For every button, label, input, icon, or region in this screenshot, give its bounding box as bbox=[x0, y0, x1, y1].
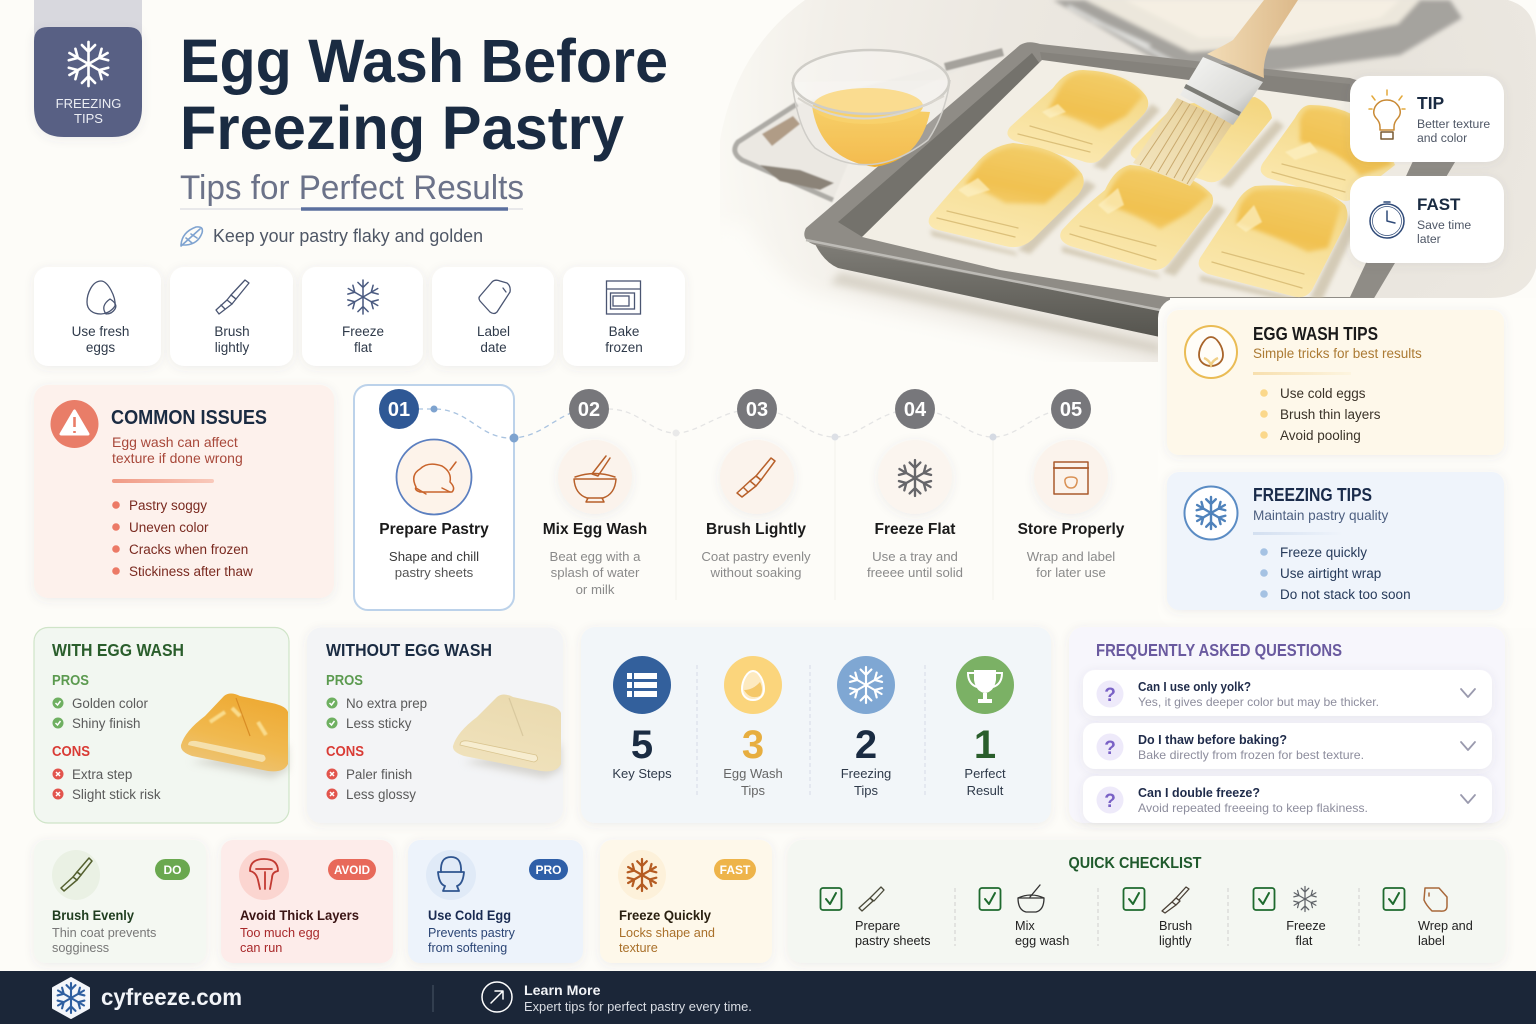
tip card: pro bbox=[408, 840, 583, 963]
subtitle: Tips for Perfect Results bbox=[180, 169, 524, 207]
panel: freezing tips: FREEZING TIPS bbox=[1253, 485, 1372, 505]
tip card: pro: from softening bbox=[428, 941, 507, 955]
badge: freezing tips: FREEZING bbox=[56, 96, 121, 111]
pastry 6 bbox=[1199, 185, 1348, 297]
tip card: avoid: can run bbox=[240, 941, 282, 955]
callout: tip bbox=[1350, 76, 1504, 162]
step 05 store properly bbox=[1018, 389, 1125, 580]
badge: fast: FAST bbox=[720, 863, 751, 877]
tip card: do: Brush Evenly bbox=[52, 907, 134, 923]
icon: arrow circle bbox=[482, 982, 512, 1012]
step 04 freeze flat: Freeze Flat bbox=[875, 521, 955, 538]
faq row 1: Can I use only yolk? bbox=[1138, 679, 1251, 694]
panel: brush lightly: lightly bbox=[215, 340, 250, 355]
panel: without egg wash: PROS bbox=[326, 673, 363, 689]
faq row 3 bbox=[1083, 776, 1492, 823]
step 02 mix egg wash: Mix Egg Wash bbox=[543, 521, 647, 538]
step 01 prepare pastry: pastry sheets bbox=[395, 565, 474, 580]
panel: common issues: Egg wash can affect bbox=[112, 434, 238, 450]
icon: egg in cup bbox=[438, 857, 464, 891]
badge: do bbox=[155, 859, 190, 880]
stat: egg wash tips: Tips bbox=[741, 783, 766, 798]
step 05 store properly: Store Properly bbox=[1018, 521, 1125, 538]
panel: use fresh eggs: Use fresh bbox=[72, 324, 129, 339]
row of six rolled pastries bbox=[929, 70, 1395, 297]
panel: without egg wash: No extra prep bbox=[346, 696, 427, 711]
footer bar: cyfreeze.com bbox=[101, 984, 242, 1010]
panel: freeze flat: flat bbox=[354, 340, 372, 355]
step 02 mix egg wash: or milk bbox=[576, 582, 615, 597]
panel: bake frozen: frozen bbox=[605, 340, 643, 355]
panel: freeze flat: Freeze bbox=[342, 324, 384, 339]
step 1 highlight card bbox=[354, 385, 514, 610]
panel: freezing tips: Do not stack too soon bbox=[1280, 587, 1411, 602]
process timeline bbox=[354, 385, 1125, 610]
panel: quick checklist: QUICK CHECKLIST bbox=[1068, 855, 1202, 872]
icon: snowflake ring bbox=[1184, 486, 1238, 540]
badge: fast bbox=[714, 859, 756, 880]
icon: stopwatch bbox=[1370, 202, 1404, 238]
tip card: pro: Use Cold Egg bbox=[428, 907, 511, 923]
stat: perfect result: 1 bbox=[974, 723, 996, 767]
panel: bake frozen: Bake bbox=[609, 324, 639, 339]
icon: light bulb bbox=[1369, 90, 1405, 139]
panel: without egg wash: Less sticky bbox=[346, 716, 412, 731]
stat: egg wash tips bbox=[723, 656, 783, 798]
faq row 3: Avoid repeated freeeing to keep flakiness. bbox=[1138, 801, 1368, 815]
check item: prepare: pastry sheets bbox=[855, 934, 930, 948]
callout: tip: and color bbox=[1417, 131, 1467, 145]
check item: mix bbox=[980, 885, 1069, 948]
panel: brush lightly: Brush bbox=[214, 324, 250, 339]
step 04 freeze flat bbox=[867, 389, 963, 580]
callout: fast bbox=[1350, 176, 1504, 263]
stat: key steps: 5 bbox=[631, 723, 653, 767]
pastry 1 bbox=[1007, 70, 1148, 163]
panel: brush lightly bbox=[170, 267, 293, 366]
check item: brush: lightly bbox=[1159, 934, 1192, 948]
tip card: do: Thin coat prevents bbox=[52, 926, 156, 940]
dashed connector bbox=[418, 409, 589, 438]
step 03 brush lightly bbox=[701, 389, 811, 580]
step 03 brush lightly: Brush Lightly bbox=[706, 521, 806, 538]
panel: with egg wash: Extra step bbox=[72, 767, 132, 782]
stat: perfect result: Result bbox=[967, 783, 1004, 798]
faq row 1: ? bbox=[1104, 685, 1116, 706]
callout: fast: later bbox=[1417, 232, 1441, 246]
step 01 prepare pastry: Shape and chill bbox=[389, 549, 479, 564]
tip card: fast: texture bbox=[619, 941, 658, 955]
stat: egg wash tips: Egg Wash bbox=[723, 766, 783, 781]
hero photo: egg-washed pastry on tray with brush bbox=[731, 0, 1536, 362]
step 05 store properly: for later use bbox=[1036, 565, 1106, 580]
check item: freeze: Freeze bbox=[1286, 919, 1326, 933]
tip card: fast bbox=[600, 840, 772, 963]
step 01 prepare pastry: Prepare Pastry bbox=[379, 521, 489, 538]
check item: wrap: Wrep and bbox=[1418, 919, 1473, 933]
panel: with egg wash bbox=[34, 628, 289, 823]
faq row 2: Bake directly from frozen for best texture. bbox=[1138, 748, 1364, 762]
callout: tip: Better texture bbox=[1417, 117, 1490, 131]
icon: oven bbox=[606, 281, 640, 314]
badge: freezing tips: TIPS bbox=[74, 111, 103, 126]
panel: freezing tips: Use airtight wrap bbox=[1280, 566, 1381, 581]
panel: key numbers bbox=[581, 627, 1051, 823]
icon: dripping egg bbox=[250, 859, 278, 889]
pastry shadows bbox=[930, 104, 1360, 305]
step 03 brush lightly: Coat pastry evenly bbox=[701, 549, 811, 564]
check item: wrap bbox=[1384, 888, 1473, 948]
badge: do: DO bbox=[164, 863, 182, 877]
stat: freezing tips: Freezing bbox=[841, 766, 891, 781]
icon: brush bbox=[216, 280, 249, 314]
tip card: avoid: Too much egg bbox=[240, 926, 320, 940]
panel: faq bbox=[1069, 627, 1505, 823]
check item: prepare: Prepare bbox=[855, 919, 900, 933]
check item: freeze bbox=[1254, 886, 1326, 948]
faq row 3: ? bbox=[1104, 791, 1116, 812]
panel: with egg wash: Shiny finish bbox=[72, 716, 140, 731]
icon: snowflake bbox=[626, 859, 658, 891]
panel: use fresh eggs: eggs bbox=[86, 340, 115, 355]
panel: with egg wash: WITH EGG WASH bbox=[52, 640, 184, 660]
footer bar bbox=[0, 971, 1536, 1024]
panel: common issues bbox=[34, 385, 334, 598]
tagline: Keep your pastry flaky and golden bbox=[213, 226, 483, 246]
step 02 mix egg wash bbox=[543, 389, 647, 597]
panel: with egg wash: PROS bbox=[52, 673, 89, 689]
panel: faq: FREQUENTLY ASKED QUESTIONS bbox=[1096, 640, 1342, 660]
check item: freeze: flat bbox=[1296, 934, 1313, 948]
check item: prepare bbox=[820, 887, 930, 948]
faq row 1 bbox=[1083, 670, 1492, 716]
panel: common issues: Uneven color bbox=[129, 520, 209, 535]
stat: freezing tips: Tips bbox=[854, 783, 879, 798]
faq row 2: Do I thaw before baking? bbox=[1138, 732, 1287, 747]
tip card: avoid: Avoid Thick Layers bbox=[240, 907, 359, 923]
panel: with egg wash: CONS bbox=[52, 744, 90, 760]
icon: tag bbox=[479, 280, 510, 314]
stat: egg wash tips: 3 bbox=[742, 723, 764, 767]
pastry 5 bbox=[1261, 105, 1395, 201]
badge: avoid bbox=[328, 859, 376, 880]
stat: freezing tips: 2 bbox=[855, 723, 877, 767]
icon: snowflake bbox=[66, 42, 111, 86]
panel: freezing tips bbox=[1167, 472, 1504, 610]
panel: common issues: texture if done wrong bbox=[112, 450, 243, 466]
check item: brush: Brush bbox=[1159, 919, 1192, 933]
footer bar: Learn More bbox=[524, 983, 601, 999]
panel: label date bbox=[432, 267, 554, 366]
stat: freezing tips bbox=[837, 656, 895, 798]
tip card: do: sogginess bbox=[52, 941, 109, 955]
panel: without egg wash: WITHOUT EGG WASH bbox=[326, 640, 492, 660]
check item: mix: egg wash bbox=[1015, 934, 1069, 948]
panel: egg wash tips bbox=[1167, 310, 1504, 455]
panel backing for tips column bbox=[1158, 298, 1536, 628]
step 04 freeze flat: 04 bbox=[904, 399, 927, 421]
faq row 3: Can I double freeze? bbox=[1138, 785, 1260, 800]
faq row 2 bbox=[1083, 723, 1492, 769]
panel: common issues: COMMON ISSUES bbox=[111, 407, 267, 429]
step 04 freeze flat: Use a tray and bbox=[872, 549, 958, 564]
step 02 mix egg wash: splash of water bbox=[551, 565, 640, 580]
panel: use fresh eggs bbox=[34, 267, 161, 366]
pastry 3 bbox=[1060, 165, 1213, 270]
icon: brush bbox=[61, 858, 92, 891]
panel: freeze flat bbox=[302, 267, 423, 366]
faq row 2: ? bbox=[1104, 738, 1116, 759]
logo: snowflake hexagon bbox=[53, 978, 89, 1018]
tip card: avoid bbox=[221, 840, 393, 963]
panel: common issues: Pastry soggy bbox=[129, 498, 207, 513]
title: Freezing Pastry bbox=[180, 94, 624, 162]
icon: brush leaf bbox=[181, 227, 202, 246]
baking tray handle bbox=[733, 50, 1003, 200]
step 01 prepare pastry bbox=[379, 389, 489, 580]
panel: with egg wash: Slight stick risk bbox=[72, 787, 161, 802]
check item: brush bbox=[1124, 887, 1192, 948]
soft fade of photo lower-left bbox=[786, 294, 1143, 362]
step 01 prepare pastry: 01 bbox=[388, 399, 410, 421]
panel: label date: Label bbox=[477, 324, 510, 339]
pastry photo: golden bbox=[181, 694, 288, 778]
tip card: fast: Freeze Quickly bbox=[619, 907, 711, 923]
baking tray bbox=[804, 42, 1480, 338]
title bbox=[180, 27, 668, 162]
panel: common issues: Cracks when frozen bbox=[129, 542, 248, 557]
step 02 mix egg wash: 02 bbox=[578, 399, 600, 421]
tip card: pro: Prevents pastry bbox=[428, 926, 516, 940]
callout: fast: Save time bbox=[1417, 218, 1471, 232]
panel: egg wash tips: Avoid pooling bbox=[1280, 428, 1361, 443]
icon: egg ring bbox=[1185, 326, 1237, 378]
panel: egg wash tips: Simple tricks for best results bbox=[1253, 346, 1422, 361]
tip card: do bbox=[34, 840, 206, 963]
panel: egg wash tips: Brush thin layers bbox=[1280, 407, 1381, 422]
badge: avoid: AVOID bbox=[334, 863, 370, 877]
step 05 store properly: 05 bbox=[1060, 399, 1082, 421]
callout: fast: FAST bbox=[1417, 195, 1461, 214]
panel: without egg wash: Paler finish bbox=[346, 767, 412, 782]
foil-wrapped pastry tray in the background bbox=[1053, 0, 1462, 74]
stat: key steps: Key Steps bbox=[612, 766, 672, 781]
panel: label date: date bbox=[480, 340, 507, 355]
panel: without egg wash: CONS bbox=[326, 744, 364, 760]
badge: pro bbox=[529, 859, 568, 880]
panel: egg wash tips: Use cold eggs bbox=[1280, 386, 1366, 401]
icon: egg bbox=[87, 281, 116, 314]
panel: without egg wash bbox=[307, 628, 563, 823]
panel: without egg wash: Less glossy bbox=[346, 787, 416, 802]
pastry brush bbox=[1133, 0, 1298, 186]
panel: quick checklist bbox=[788, 840, 1505, 963]
glass bowl of egg wash bbox=[792, 50, 950, 167]
stat: perfect result bbox=[956, 656, 1014, 798]
panel: freezing tips: Freeze quickly bbox=[1280, 545, 1367, 560]
stat: key steps bbox=[612, 656, 672, 781]
pastry 2 bbox=[929, 143, 1084, 247]
panel: egg wash tips: EGG WASH TIPS bbox=[1253, 324, 1378, 344]
footer bar: Expert tips for perfect pastry every time. bbox=[524, 999, 752, 1014]
callout: tip: TIP bbox=[1417, 93, 1445, 113]
pastry photo: pale bbox=[453, 694, 561, 778]
title: Egg Wash Before bbox=[180, 27, 668, 95]
badge: pro: PRO bbox=[535, 863, 562, 877]
soft shadow of tray on table bbox=[830, 272, 1160, 354]
check item: mix: Mix bbox=[1015, 919, 1035, 933]
check item: wrap: label bbox=[1418, 934, 1445, 948]
step 05 store properly: Wrap and label bbox=[1027, 549, 1115, 564]
panel: with egg wash: Golden color bbox=[72, 696, 148, 711]
step 02 mix egg wash: Beat egg with a bbox=[550, 549, 641, 564]
step 03 brush lightly: without soaking bbox=[710, 565, 801, 580]
panel: freezing tips: Maintain pastry quality bbox=[1253, 508, 1388, 523]
panel: common issues: Stickiness after thaw bbox=[129, 564, 253, 579]
tip card: fast: Locks shape and bbox=[619, 926, 715, 940]
badge: freezing tips bbox=[34, 0, 142, 137]
panel: bake frozen bbox=[563, 267, 685, 366]
faq row 1: Yes, it gives deeper color but may be thicker. bbox=[1138, 695, 1379, 709]
pastry 4 behind brush bbox=[1131, 97, 1272, 182]
stat: perfect result: Perfect bbox=[964, 766, 1006, 781]
icon: warning bbox=[50, 400, 98, 448]
step 03 brush lightly: 03 bbox=[746, 399, 768, 421]
icon: snowflake bbox=[346, 280, 380, 314]
step 04 freeze flat: freeee until solid bbox=[867, 565, 963, 580]
